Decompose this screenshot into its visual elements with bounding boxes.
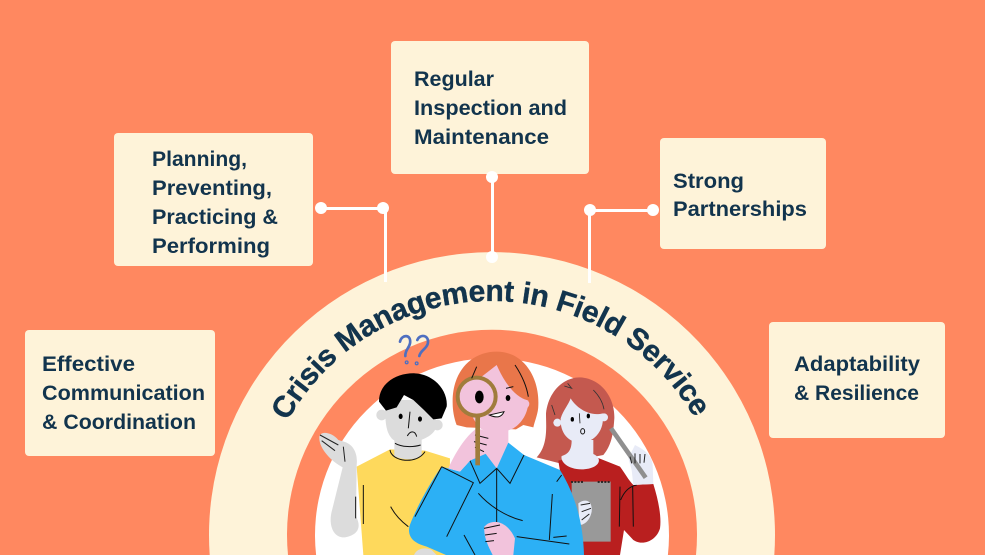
box: strong partnerships: Strong [673, 170, 744, 193]
illustration: three people [319, 336, 660, 555]
person: man in yellow shirt [319, 373, 450, 555]
box: adaptability and resilience: Adaptability [794, 353, 920, 376]
connector: partnerships box to arch [584, 204, 659, 283]
box: planning, preventing, practicing and performing: Preventing, [152, 177, 272, 200]
connector: planning box to arch [315, 202, 389, 282]
box: planning, preventing, practicing and performing: Practicing & [152, 206, 278, 229]
box: planning, preventing, practicing and performing: Performing [152, 235, 270, 258]
icon: question marks [400, 336, 428, 364]
curved title: Crisis Management in Field Service [273, 281, 706, 418]
box: effective communication and coordination: & Coordination [42, 411, 196, 434]
box: adaptability and resilience [769, 322, 945, 438]
box: effective communication and coordination: Effective [42, 353, 135, 376]
person: woman in red sweater [537, 377, 660, 555]
box: adaptability and resilience: & Resilience [794, 382, 919, 405]
arch: concentric half circles [209, 252, 775, 555]
box: effective communication and coordination [25, 330, 215, 456]
box: regular inspection and maintenance [391, 41, 589, 174]
box: strong partnerships [660, 138, 826, 249]
box: planning, preventing, practicing and performing [114, 133, 313, 266]
box: strong partnerships: Partnerships [673, 198, 807, 221]
box: planning, preventing, practicing and performing: Planning, [152, 148, 247, 171]
box: regular inspection and maintenance: Maintenance [414, 126, 549, 149]
box: regular inspection and maintenance: Inspection and [414, 97, 567, 120]
box: regular inspection and maintenance: Regular [414, 68, 494, 91]
connector: inspection box to arch [486, 171, 498, 263]
person: central woman in blue shirt with magnifying glass [409, 352, 584, 555]
box: effective communication and coordination: Communication [42, 382, 205, 405]
